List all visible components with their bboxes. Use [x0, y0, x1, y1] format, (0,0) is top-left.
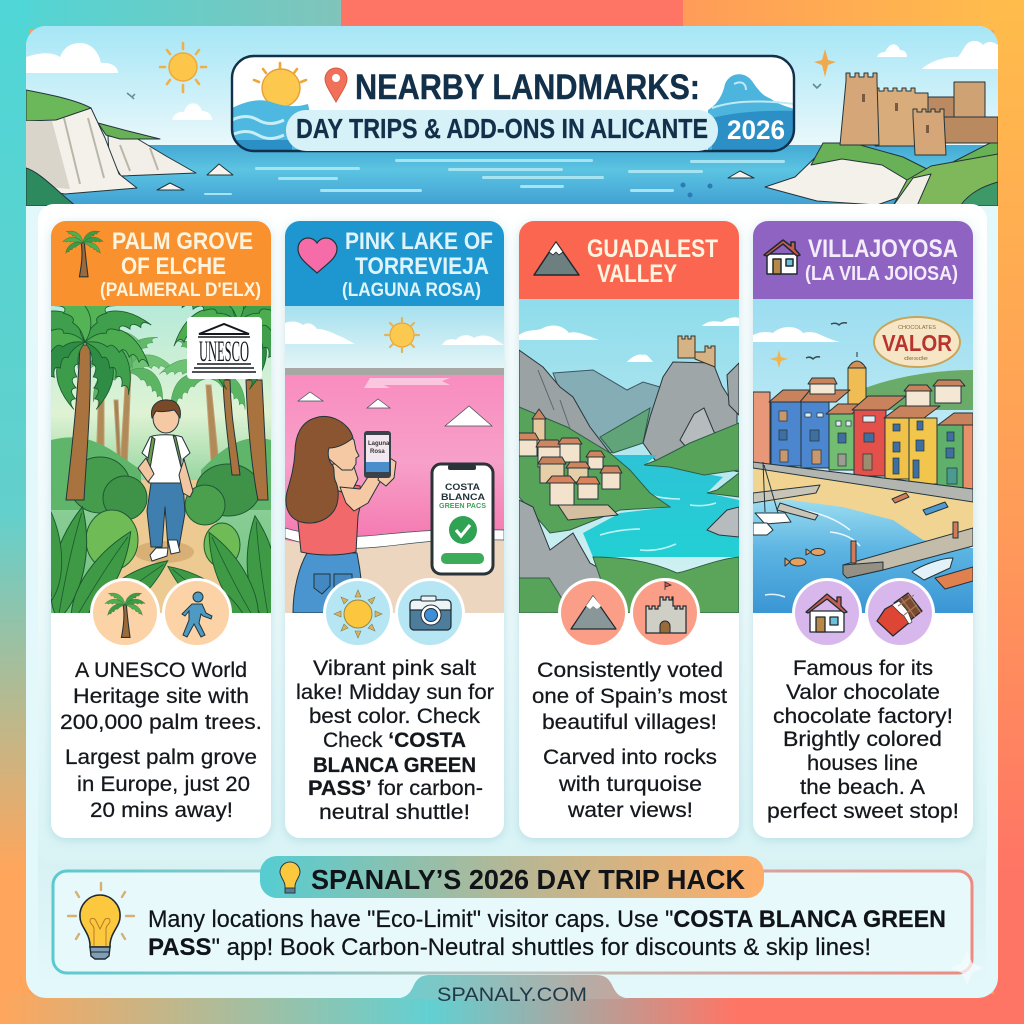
- sparkle and birds: [127, 49, 836, 99]
- sparkle: [950, 950, 984, 986]
- illustration: valley: [519, 299, 739, 613]
- text: Palm Grove description: Heritage site with: [73, 685, 249, 708]
- right shore hills: [644, 423, 739, 475]
- text: Pink Lake description: [296, 657, 494, 824]
- text: Pink Lake description: best color. Check: [309, 705, 481, 728]
- towels: [892, 493, 948, 515]
- icon: heart: [298, 238, 337, 273]
- birds and sparkle: [806, 323, 847, 359]
- header: Palm Grove: [51, 221, 271, 307]
- text: Villajoyosa description: chocolate factory!: [773, 705, 953, 728]
- rocks: [157, 164, 754, 190]
- sand path: [117, 480, 259, 613]
- foreground leaves: [51, 506, 88, 613]
- held phone: Laguna: [368, 441, 390, 447]
- text: Palm Grove description: Largest palm grove: [65, 746, 257, 769]
- water highlights: [204, 159, 785, 195]
- text: Villajoyosa description: Brightly colored: [783, 728, 942, 751]
- woman: [286, 416, 396, 613]
- windows and doors: [779, 411, 957, 484]
- text: Palm Grove description: 20 mins away!: [90, 799, 233, 822]
- text: Villajoyosa description: houses line: [807, 752, 918, 775]
- icon: house circle: [792, 578, 862, 648]
- Valor oval: CHOCOLATES: [898, 325, 937, 331]
- text: Palm Grove description: [60, 659, 262, 822]
- walker: [138, 400, 193, 561]
- text: Villajoyosa description: [767, 657, 959, 823]
- icon: palm: [63, 228, 103, 277]
- coastal header scene: [26, 26, 998, 207]
- text: Guadalest description: Carved into rocks: [543, 746, 717, 769]
- text: Pink Lake description: neutral shuttle!: [319, 801, 470, 824]
- Green Pass phone: GREEN PACS: [439, 503, 486, 510]
- header: Pink Lake: TORREVIEJA: [355, 253, 489, 280]
- text: Villajoyosa description: perfect sweet stop!: [767, 800, 959, 823]
- text: Villajoyosa description: the beach. A: [800, 776, 925, 799]
- hack heading pill: [260, 856, 764, 898]
- illustration: harbour: [753, 299, 973, 613]
- banner sub-title pill: DAY TRIPS & ADD-ONS IN ALICANTE: [296, 113, 708, 144]
- text: Palm Grove description: in Europe, just 20: [77, 773, 250, 796]
- icon: walker circle: [162, 578, 232, 648]
- promenade: [753, 462, 973, 502]
- Valor oval: [874, 317, 960, 367]
- UNESCO badge: UNESCO: [199, 335, 249, 368]
- icon: camera circle: [395, 578, 465, 648]
- hills and bell tower: [860, 370, 973, 410]
- text: Guadalest description: water views!: [567, 799, 693, 822]
- header: Guadalest: GUADALEST: [587, 235, 718, 263]
- icon: light bulb: [68, 883, 134, 959]
- hack heading pill: SPANALY’S 2026 DAY TRIP HACK: [311, 864, 745, 895]
- icon: chocolate circle: [865, 578, 935, 648]
- text: Guadalest description: beautiful villages!: [542, 711, 717, 734]
- header: Palm Grove: PALM GROVE: [112, 228, 253, 255]
- illustration: palm grove path: [51, 306, 271, 613]
- Green Pass phone: [432, 464, 493, 574]
- footer tab: [396, 975, 630, 1006]
- title banner: [232, 56, 794, 151]
- icon: sun circle: [323, 578, 393, 648]
- sun: [385, 318, 419, 352]
- header: Pink Lake: [285, 221, 504, 307]
- text: Guadalest description: Consistently voted: [537, 659, 723, 682]
- fish: [785, 548, 825, 566]
- header: Guadalest: [519, 221, 739, 300]
- header: Pink Lake: (LAGUNA ROSA): [342, 280, 481, 301]
- text: Pink Lake description: PASS’ for carbon-: [308, 777, 483, 800]
- fish shadows: [680, 182, 712, 198]
- text: Villajoyosa description: Famous for its: [793, 657, 933, 680]
- card: Guadalest Valley: [519, 221, 739, 838]
- UNESCO badge: [187, 317, 262, 379]
- icon: castle circle: [630, 578, 700, 648]
- Valor oval: desde: [904, 356, 928, 362]
- header: Palm Grove: (PALMERAL D'ELX): [100, 280, 261, 301]
- left mountain: [519, 350, 610, 452]
- buildings: [753, 378, 973, 489]
- distant mountains: [553, 370, 660, 457]
- Valor oval: VALOR: [882, 330, 952, 356]
- banner sun: [254, 63, 306, 107]
- water: [753, 500, 973, 613]
- Day trip hack callout: [53, 856, 984, 986]
- icon: house: [764, 240, 800, 274]
- banner sub-title pill: [286, 110, 718, 151]
- beach: [753, 468, 973, 547]
- card: Pink Lake of Torrevieja: [285, 221, 504, 838]
- header: Guadalest: VALLEY: [597, 260, 677, 288]
- header: Villajoyosa: (LA VILA JOIOSA): [805, 263, 958, 285]
- left green slope: [519, 407, 670, 533]
- location pin: [325, 68, 347, 102]
- bushes: [70, 457, 260, 570]
- header: Villajoyosa: VILLAJOYOSA: [808, 235, 958, 263]
- hack body text: Many locations have "Eco-Limit" visitor caps. Use "COSTA BLANCA GREEN: [148, 906, 946, 933]
- header: Pink Lake: PINK LAKE OF: [345, 228, 493, 255]
- footer tab: SPANALY.COM: [437, 985, 587, 1006]
- castle: [840, 73, 998, 155]
- text: Pink Lake description: Check ‘COSTA: [323, 729, 466, 752]
- text: Palm Grove description: 200,000 palm trees.: [60, 711, 262, 734]
- hack body text: [148, 906, 946, 961]
- Green Pass phone: COSTA: [445, 482, 480, 493]
- village: [519, 409, 622, 520]
- cliff castle: [678, 336, 715, 367]
- text: Villajoyosa description: Valor chocolate: [786, 681, 940, 704]
- sand and shoreline: [285, 539, 504, 613]
- castle rock: [643, 362, 737, 470]
- castle windows: [862, 94, 929, 133]
- illustration: pink lake: [285, 306, 504, 613]
- held phone: [364, 431, 391, 478]
- river: [583, 455, 739, 557]
- year: 2026: [727, 115, 785, 145]
- hack body text: PASS" app! Book Carbon-Neutral shuttles for discounts & skip lines!: [148, 934, 871, 961]
- header: Palm Grove: OF ELCHE: [121, 253, 226, 280]
- text: Palm Grove description: A UNESCO World: [75, 659, 247, 682]
- text: Pink Lake description: BLANCA GREEN: [313, 754, 476, 777]
- held phone: Rosa: [370, 449, 385, 455]
- icon: palm circle: [90, 578, 160, 648]
- foreground rocks: [519, 500, 637, 613]
- icon: mountain circle: [558, 578, 628, 648]
- trunks: [66, 345, 90, 500]
- white content panel: [38, 204, 987, 864]
- card: Palm Grove of Elche: [46, 218, 276, 844]
- text: Pink Lake description: Vibrant pink salt: [313, 657, 476, 680]
- right cliffs: [765, 139, 998, 206]
- icon: mountain: [534, 242, 579, 275]
- clouds: [26, 41, 998, 120]
- main title: NEARBY LANDMARKS:: [355, 68, 700, 107]
- background foliage: [51, 437, 271, 510]
- left cliffs: [26, 90, 196, 206]
- text: Guadalest description: one of Spain’s most: [532, 685, 727, 708]
- text: Guadalest description: [532, 659, 727, 822]
- sailboats and jetty: [753, 462, 820, 535]
- Green Pass phone: BLANCA: [441, 492, 485, 503]
- sun: [160, 43, 206, 92]
- text: Pink Lake description: lake! Midday sun for: [296, 681, 494, 704]
- text: Guadalest description: with turquoise: [558, 773, 702, 796]
- card: Villajoyosa: [753, 221, 973, 838]
- pier: [843, 522, 973, 589]
- salt piles: [298, 392, 492, 426]
- clouds: [285, 322, 504, 345]
- header: Villajoyosa: [753, 221, 973, 300]
